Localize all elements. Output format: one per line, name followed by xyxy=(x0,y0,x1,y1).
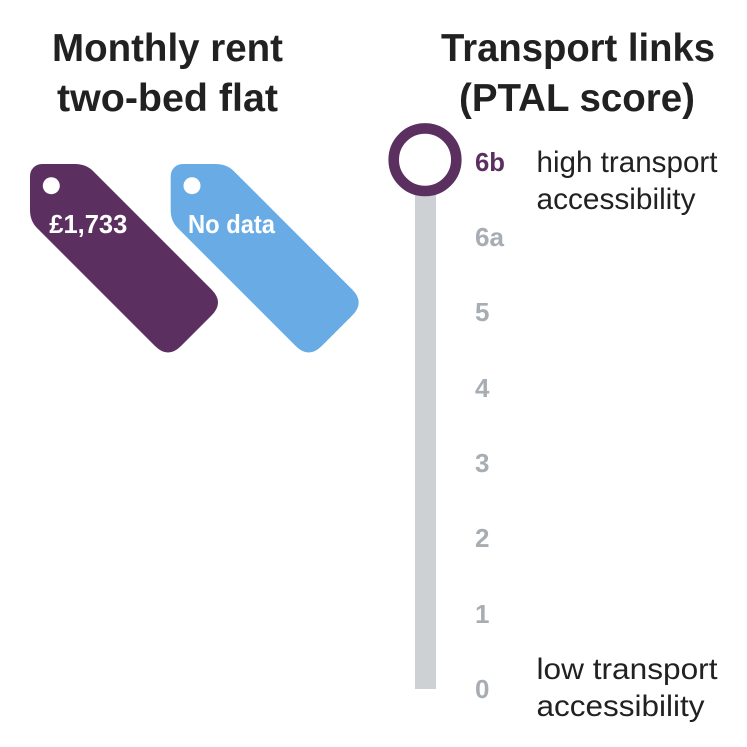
score labels: 6a to 0: 3 xyxy=(475,448,489,478)
heading: monthly rent: Monthly rent xyxy=(52,27,283,70)
label: high transport accessibility: high transport xyxy=(536,146,718,179)
score labels: 6a to 0: 2 xyxy=(475,523,489,553)
price tag: no data: No data xyxy=(188,209,275,239)
label: low transport accessibility xyxy=(536,653,718,723)
label: high transport accessibility: accessibility xyxy=(536,183,696,216)
heading: transport links: Transport links xyxy=(441,27,715,70)
score labels: 6a to 0: 0 xyxy=(475,674,489,704)
score labels: 6a to 0 xyxy=(475,222,505,704)
heading: transport links xyxy=(441,27,715,120)
price tag: £1,733 xyxy=(30,164,218,352)
label: high transport accessibility xyxy=(536,146,718,216)
heading: monthly rent: two-bed flat xyxy=(57,77,278,120)
PTAL scale bar xyxy=(415,160,436,689)
score label: 6b: 6b xyxy=(475,147,505,177)
price tag: £1,733: £1,733 xyxy=(49,209,127,239)
label: low transport accessibility: accessibility xyxy=(536,690,704,723)
current score marker xyxy=(394,128,456,191)
label: low transport accessibility: low transport xyxy=(536,653,718,686)
price tag: no data xyxy=(171,164,359,352)
score labels: 6a to 0: 6a xyxy=(475,222,505,252)
score labels: 6a to 0: 1 xyxy=(475,599,489,629)
score labels: 6a to 0: 4 xyxy=(475,373,490,403)
heading: transport links: (PTAL score) xyxy=(459,77,695,120)
heading: monthly rent xyxy=(52,27,283,120)
score labels: 6a to 0: 5 xyxy=(475,297,489,327)
